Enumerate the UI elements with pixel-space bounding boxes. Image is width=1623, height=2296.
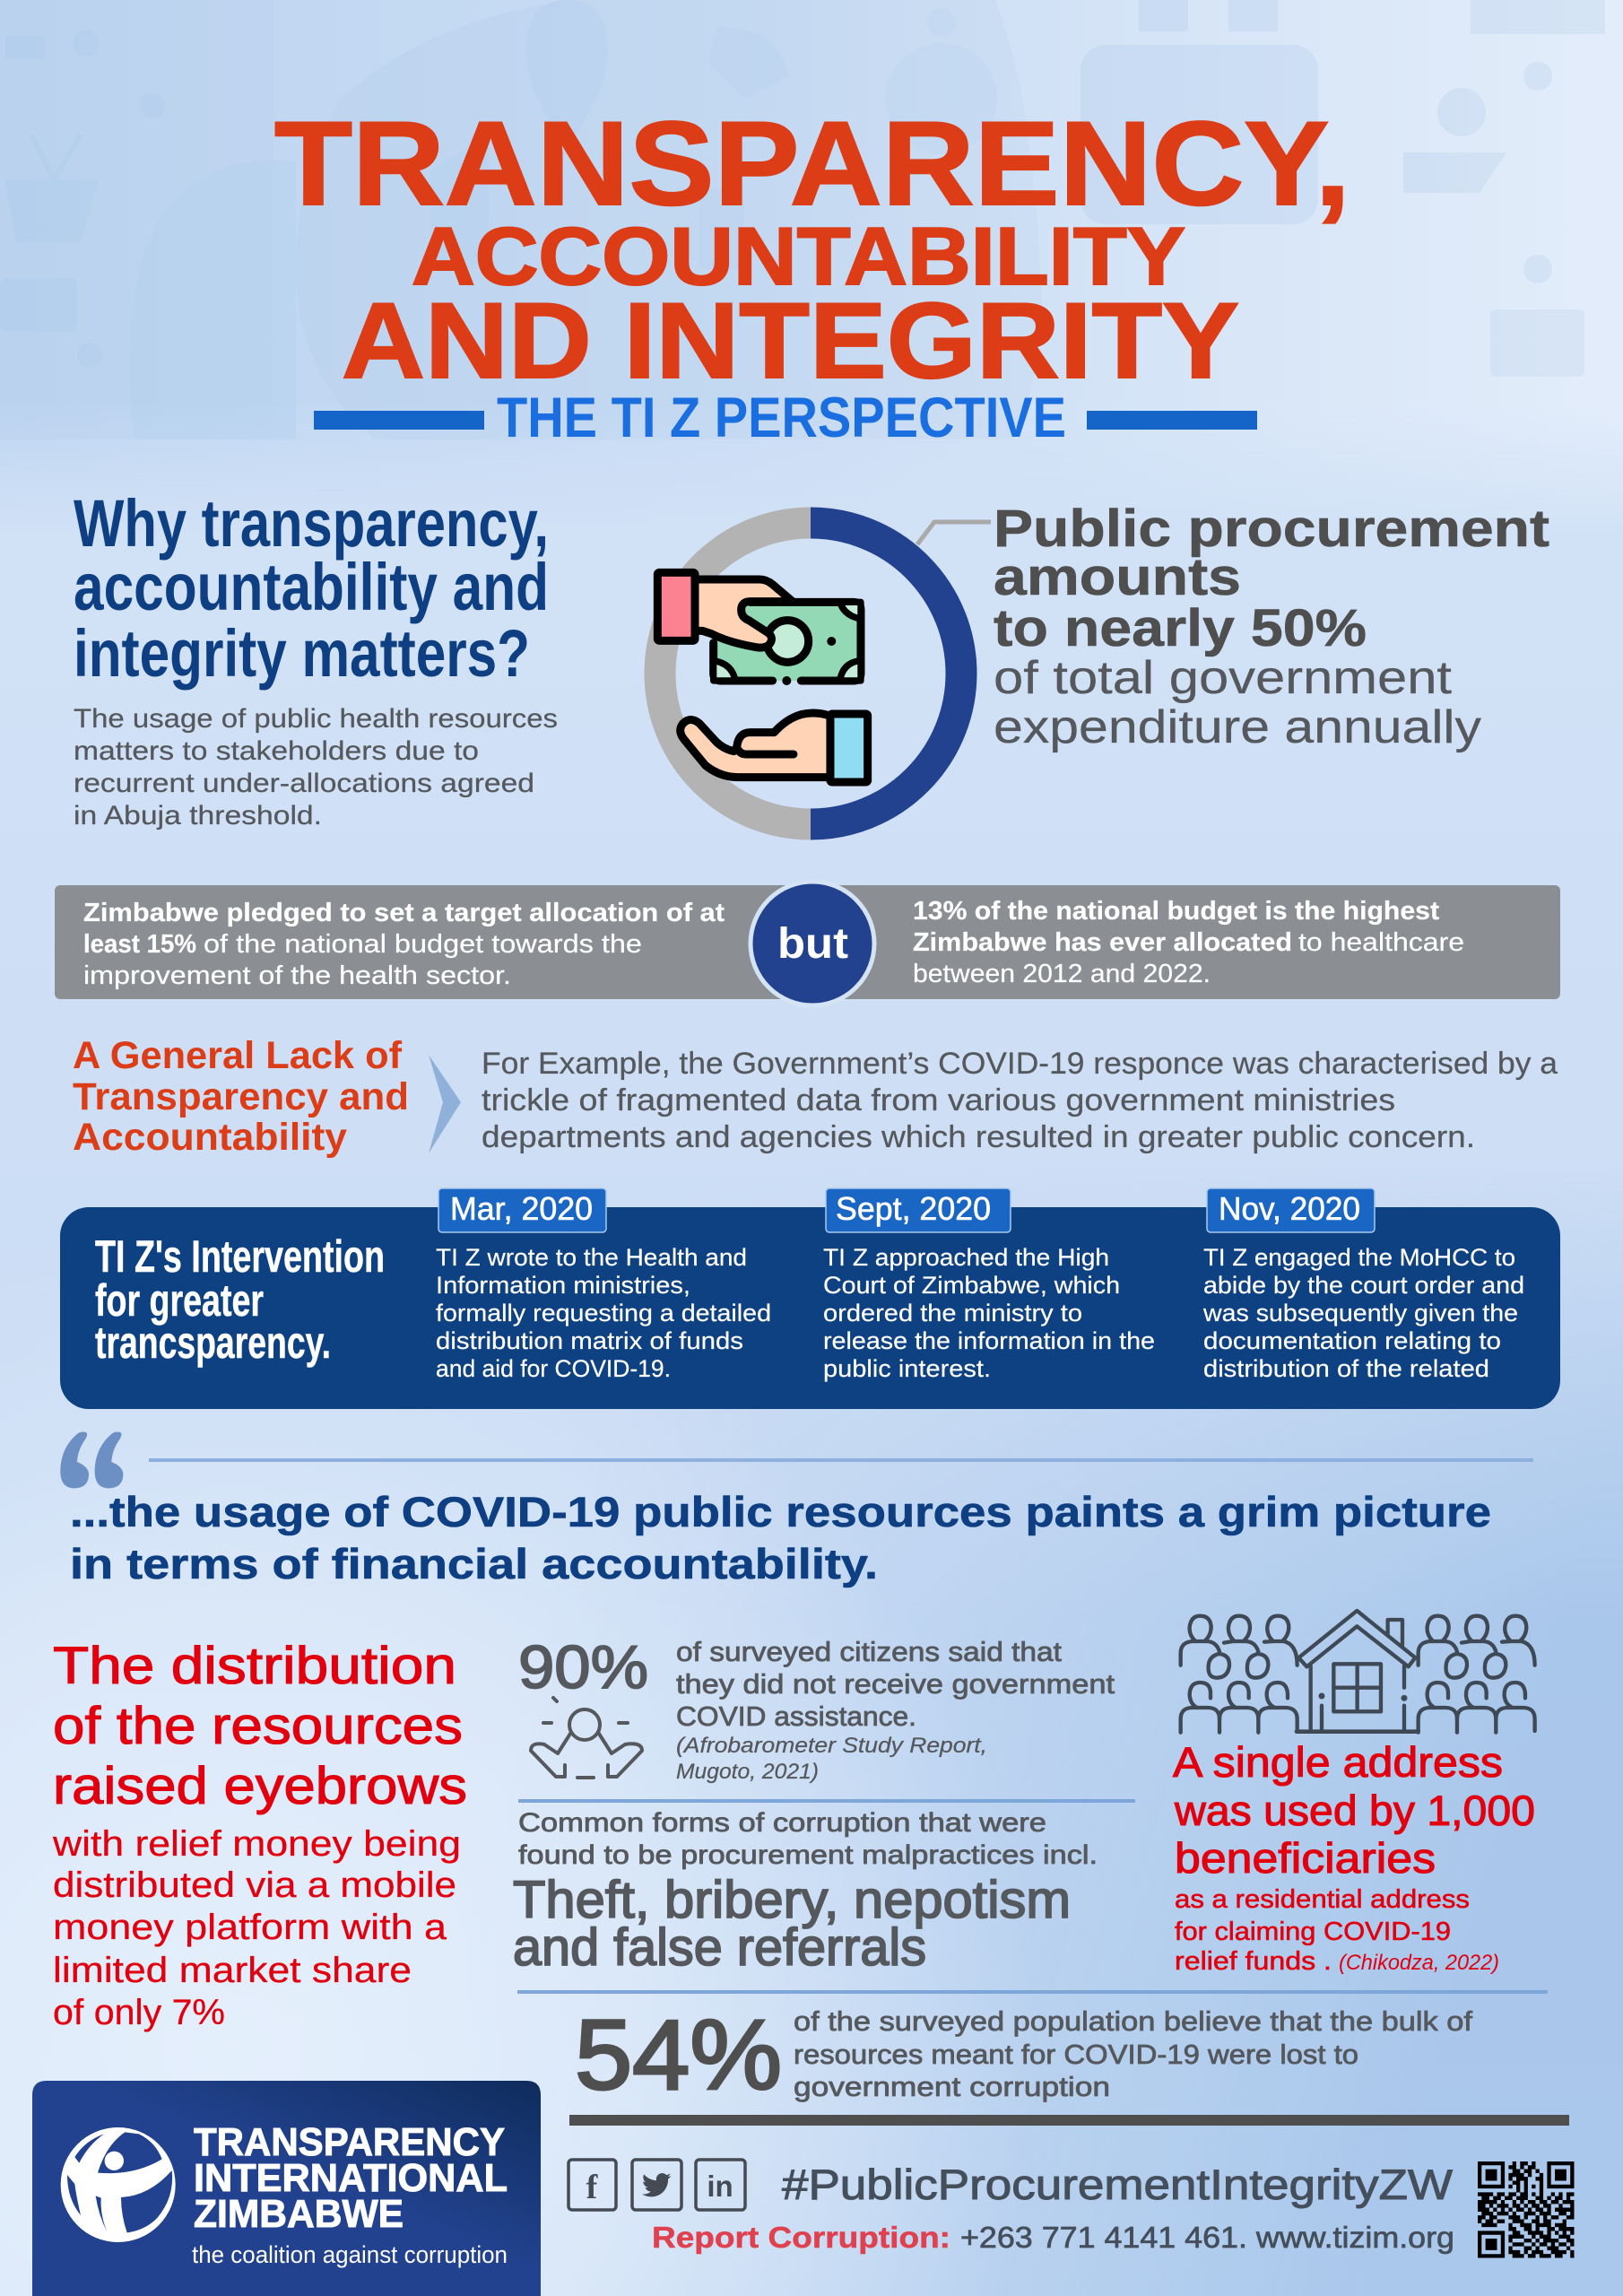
but badge: but [777,920,848,968]
icon: house surrounded by people [1181,1611,1535,1733]
text block: distribution raised eyebrows: money platform with a [53,1908,447,1947]
date tab: November 2020: Nov, 2020 [1219,1190,1360,1227]
title [274,98,1350,401]
statistic: 54 percent: government corruption [794,2071,1110,2102]
statistic: 90 percent [518,1633,1115,1784]
text: November 2020: was subsequently given the [1202,1300,1518,1326]
left pledge text: of the national budget towards the [204,930,642,959]
logo wordmark [192,2120,508,2268]
text block: single address: beneficiaries [1175,1834,1436,1882]
pull quote [70,1488,1491,1587]
text block: single address: as a residential address [1175,1885,1470,1914]
text block: single address [1173,1738,1535,1976]
but badge [751,882,874,1005]
date tab: March 2020: Mar, 2020 [450,1190,593,1227]
text: September 2020: TI Z approached the High [823,1244,1109,1271]
logo wordmark: the coalition against corruption [192,2241,508,2268]
text block: common forms of corruption: Theft, bribery, nepotism [513,1871,1071,1929]
text block: why it matters: in Abuja threshold. [74,801,322,831]
text: March 2020: TI Z wrote to the Health and [436,1244,747,1271]
text block: single address: A single address [1173,1738,1503,1786]
heading: why it matters: Why transparency, [74,486,549,561]
contact line: +263 771 4141 461. www.tizim.org [960,2221,1454,2254]
text: November 2020 [1202,1244,1524,1382]
icon: shrugging person [531,1698,642,1778]
left pledge text: improvement of the health sector. [83,961,511,990]
text: November 2020: abide by the court order and [1203,1272,1524,1299]
callout: public procurement [994,500,1549,753]
text: September 2020: release the information in the [823,1327,1155,1354]
faded background icons [0,0,1605,439]
heading: why it matters: accountability and [74,550,549,624]
left pledge text [83,899,725,990]
donut chart with money icon [657,522,991,824]
right allocation text: to healthcare [1298,928,1464,957]
icon: facebook [568,2160,616,2210]
text block: COVID-19 example: trickle of fragmented data from various government ministries [482,1083,1395,1118]
heading: general lack of transparency: A General Lack of [73,1034,403,1077]
icon: linkedin [696,2160,745,2210]
contact line [652,2221,1454,2254]
text block: why it matters: The usage of public health resources [74,704,558,734]
text block: distribution raised eyebrows: distributed via a mobile [53,1866,456,1905]
heading: general lack of transparency [73,1034,409,1159]
text block: distribution raised eyebrows: limited market share [53,1951,412,1990]
text block: single address: relief funds . [1175,1947,1332,1976]
left pledge text: least 15% [83,930,196,959]
text: November 2020: TI Z engaged the MoHCC to [1203,1244,1515,1271]
hashtag: #PublicProcurementIntegrityZW [782,2161,1454,2208]
text: November 2020: documentation relating to [1203,1327,1501,1354]
text block: distribution raised eyebrows: The distribution [53,1637,456,1695]
text: March 2020: and aid for COVID-19. [436,1355,671,1382]
text: September 2020 [823,1244,1155,1382]
heading: why it matters [74,486,549,691]
right allocation text [913,897,1464,988]
statistic: 54 percent [575,2000,1472,2110]
icon: quotation mark [60,1432,123,1488]
statistic text [676,1636,1115,1784]
text: September 2020: Court of Zimbabwe, which [823,1272,1120,1299]
text block: common forms of corruption: and false referrals [513,1918,926,1977]
text block: COVID-19 example [482,1047,1558,1154]
title: AND INTEGRITY [342,281,1239,401]
text block: why it matters [74,704,558,831]
right allocation text: between 2012 and 2022. [913,960,1211,988]
text block: single address: for claiming COVID-19 [1175,1918,1451,1946]
text: November 2020: distribution of the related [1203,1355,1489,1382]
right allocation text: Zimbabwe has ever allocated [913,928,1292,957]
statistic: 54 percent: 54% [575,2000,782,2110]
arrow: chevron [429,1055,461,1153]
panel heading: trancsparency. [95,1318,331,1368]
left pledge text: Zimbabwe pledged to set a target allocation of at [83,899,725,927]
panel: Transparency International Zimbabwe logo [32,2081,541,2296]
statistic text: of surveyed citizens said that [676,1636,1062,1667]
panel heading [95,1231,385,1368]
callout: public procurement: of total government [994,652,1453,704]
date tab: September 2020: Sept, 2020 [836,1190,991,1227]
heading: general lack of transparency: Transparency and [73,1075,409,1118]
icon: hands exchanging money [657,572,868,782]
pull quote: ...the usage of COVID-19 public resources paints a grim picture [70,1488,1491,1535]
statistic text: Mugoto, 2021) [676,1760,819,1784]
statistic text: (Afrobarometer Study Report, [676,1734,987,1758]
statistic: 54 percent: resources meant for COVID-19 were lost to [794,2039,1358,2070]
QR code [1478,2161,1575,2258]
text block: distribution raised eyebrows: of only 7% [53,1993,225,2032]
panel heading: for greater [95,1275,264,1326]
text: September 2020: public interest. [823,1355,991,1382]
statistic text: they did not receive government [676,1668,1115,1700]
right allocation text: 13% of the national budget is the highest [913,897,1439,926]
text block: why it matters: recurrent under-allocations agreed [74,769,534,798]
title: TRANSPARENCY, [274,98,1350,230]
icon: TI globe [61,2127,176,2242]
panel heading: TI Z's Intervention [95,1231,385,1282]
text block: common forms of corruption: found to be procurement malpractices incl. [518,1840,1098,1870]
callout: public procurement: to nearly 50% [994,599,1367,657]
text block: distribution raised eyebrows [52,1637,467,2032]
callout: public procurement: expenditure annually [994,701,1481,753]
contact line: Report Corruption: [652,2221,950,2254]
text block: single address: was used by 1,000 [1174,1787,1535,1834]
text block: common forms of corruption [513,1808,1098,1977]
title: ACCOUNTABILITY [412,212,1185,302]
text block: COVID-19 example: departments and agencies which resulted in greater public concern. [482,1120,1475,1154]
text block: distribution raised eyebrows: of the resources [53,1697,463,1755]
statistic text: COVID assistance. [676,1700,916,1732]
icon: facebook: f [586,2169,599,2206]
panel: pledge comparison bar [55,882,1560,1005]
callout: public procurement: amounts [994,548,1241,606]
logo wordmark: TRANSPARENCY [194,2120,505,2164]
icon: twitter [632,2160,681,2210]
subtitle: the TI Z perspective [314,387,1257,449]
text block: distribution raised eyebrows: with relief money being [52,1824,461,1864]
subtitle: the TI Z perspective: THE TI Z PERSPECTIVE [497,387,1066,449]
text block: distribution raised eyebrows: raised eyebrows [53,1757,467,1815]
statistic: 90 percent: 90% [518,1633,648,1701]
text: March 2020: distribution matrix of funds [436,1327,743,1354]
text block: common forms of corruption: Common forms of corruption that were [518,1808,1046,1838]
text: March 2020: Information ministries, [436,1272,690,1299]
heading: general lack of transparency: Accountability [73,1116,347,1159]
text: March 2020 [436,1244,771,1382]
heading: why it matters: integrity matters? [74,616,530,691]
statistic: 54 percent: of the surveyed population believe that the bulk of [794,2005,1472,2037]
text: September 2020: ordered the ministry to [823,1300,1082,1326]
logo wordmark: ZIMBABWE [194,2192,404,2236]
panel: TI Z's intervention timeline [60,1188,1560,1409]
pull quote: in terms of financial accountability. [70,1540,878,1587]
callout: public procurement: Public procurement [994,500,1549,558]
text block: COVID-19 example: For Example, the Government’s COVID-19 responce was characterised by a [482,1047,1558,1081]
text block: why it matters: matters to stakeholders due to [74,736,479,766]
text: March 2020: formally requesting a detailed [436,1300,771,1326]
icon: linkedin: in [707,2170,733,2203]
text block: single address: (Chikodza, 2022) [1339,1951,1499,1975]
logo wordmark: INTERNATIONAL [194,2156,508,2200]
